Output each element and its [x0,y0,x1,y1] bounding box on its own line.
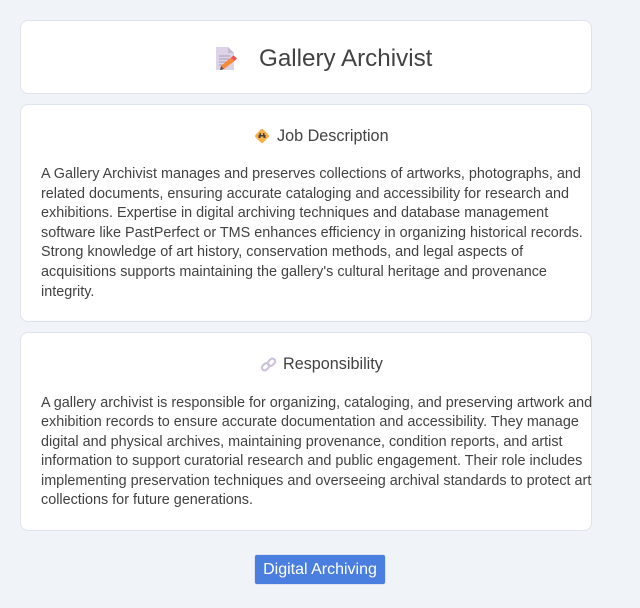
text block: job description: software like PastPerfect or TMS enhances efficiency in organizing historical records. [41,225,583,241]
text block: responsibility: collections for future generations. [41,492,253,508]
text block: responsibility: digital and physical archives, maintaining provenance, condition reports, and artist [41,434,563,450]
text block: responsibility: implementing preservation techniques and overseeing archival standards to protect art [41,473,591,489]
text block: job description: acquisitions supports maintaining the gallery's cultural heritage and provenance [41,264,547,280]
icon: orange diamond [255,128,269,144]
icon: document with pencil [216,47,237,70]
icon: chain link [260,358,276,372]
text block: responsibility: exhibition records to ensure accurate documentation and accessibility. They manage [41,414,579,430]
text block: responsibility: information to support curatorial research and public engagement. Their role includes [41,453,582,469]
text block: job description: Strong knowledge of art history, conservation methods, and legal aspects of [41,244,523,260]
panel: title card [20,20,592,94]
text block: job description [41,166,583,300]
text block: responsibility [41,394,592,508]
heading: responsibility: Responsibility [283,355,383,373]
button: digital archiving tag: Digital Archiving [263,561,377,578]
heading: job description: Job Description [277,127,389,145]
text block: job description: A Gallery Archivist manages and preserves collections of artworks, photographs, and [41,166,581,182]
panel: responsibility [20,332,592,531]
title: Gallery Archivist [259,45,432,72]
button: digital archiving tag [254,554,386,585]
text block: responsibility: A gallery archivist is responsible for organizing, cataloging, and preserving artwork and [41,394,592,410]
text block: job description: related documents, ensuring accurate cataloging and accessibility for research and [41,186,569,202]
text block: job description: exhibitions. Expertise in digital archiving techniques and database management [41,205,548,221]
text block: job description: integrity. [41,284,94,300]
panel: job description [20,104,592,322]
